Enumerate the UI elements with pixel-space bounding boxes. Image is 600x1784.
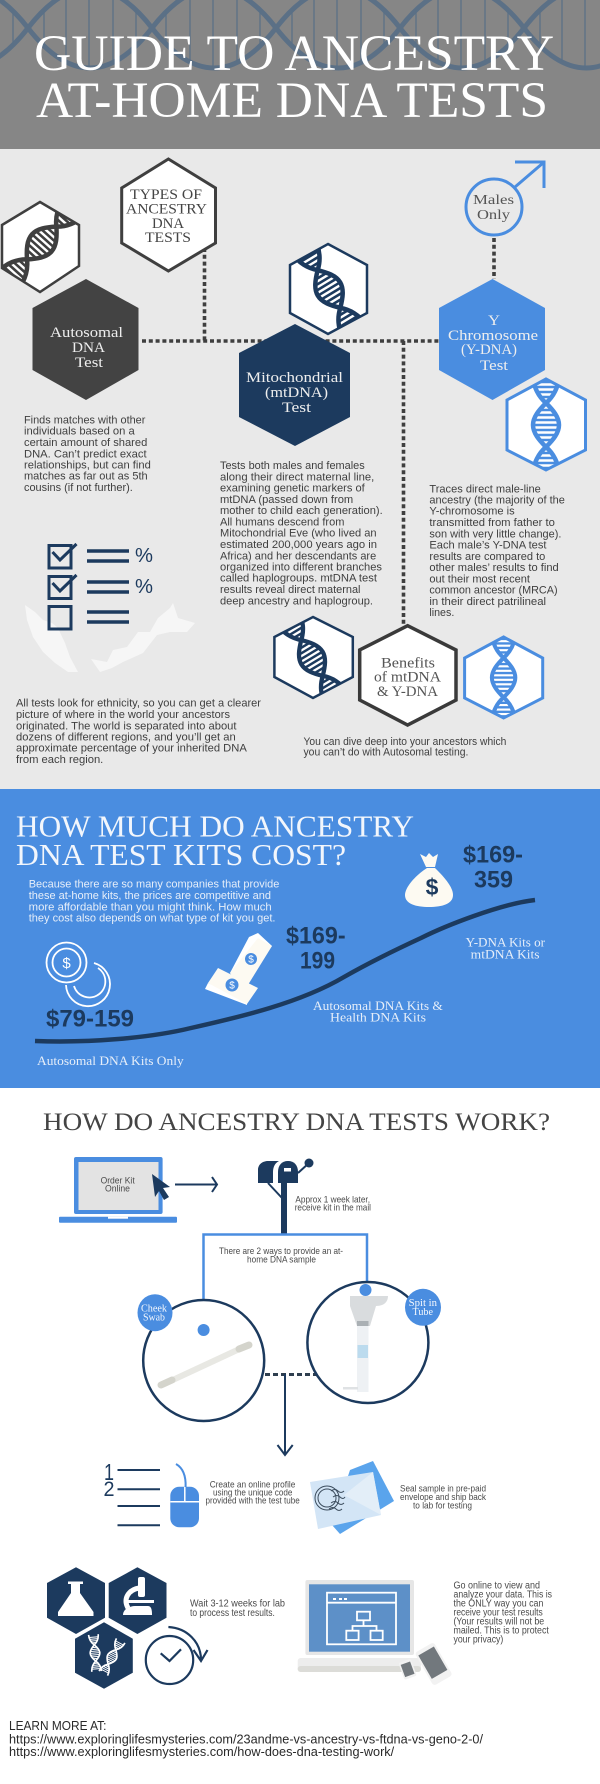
- price: 169-199: [286, 922, 346, 974]
- heading: how do tests work: HOW DO ANCESTRY DNA TESTS WORK?: [43, 1109, 550, 1136]
- hexagon: mitochondrial test: Mitochondrial: [246, 370, 343, 386]
- text: Y-DNA description: common ancestor (MRCA): [429, 585, 558, 597]
- hexagon: mitochondrial test: (mtDNA): [265, 385, 328, 401]
- text: autosomal description: cousins (if not further).: [24, 482, 133, 494]
- DNA helix background: [0, 0, 600, 68]
- price: 169-199: 199: [300, 947, 335, 974]
- icon: mitochondrial DNA hexagon: [290, 239, 367, 339]
- text: one week later: Approx 1 week later,: [295, 1194, 370, 1204]
- hexagon: autosomal test: DNA: [72, 340, 105, 356]
- text: view data online: mailed. This is to protect: [454, 1625, 549, 1636]
- panel: cheek swab: Swab: [143, 1313, 165, 1324]
- hexagon: Y chromosome test: (Y-DNA): [461, 342, 517, 358]
- text: cost description: [29, 879, 279, 924]
- text: autosomal description: certain amount of shared: [24, 437, 147, 449]
- hexagon: Y chromosome test: Chromosome: [448, 328, 538, 344]
- text: cost description: they cost also depends on what type of kit you get.: [29, 912, 276, 924]
- text: ethnicity description: originated. The world is separated into about: [16, 720, 237, 732]
- icon: mailbox: [258, 1158, 314, 1234]
- text: ethnicity description: All tests look for ethnicity, so you can get a clearer: [16, 698, 261, 710]
- price: 169-359: 359: [474, 866, 513, 893]
- text: mitochondrial description: estimated 200,000 years ago in: [220, 539, 377, 551]
- text: Y-DNA description: transmitted from father to: [429, 517, 555, 529]
- text: mitochondrial description: called haplogroups. mtDNA test: [220, 573, 378, 585]
- icon: mtDNA hexagon, benefits row: [274, 611, 353, 705]
- text: view data online: your privacy): [454, 1634, 503, 1645]
- icon: envelope: [310, 1461, 394, 1534]
- hexagon: mitochondrial test: [239, 324, 350, 446]
- price: 79-159: $79-159: [46, 1006, 134, 1033]
- text: view data online: receive your test results: [454, 1607, 543, 1618]
- icon: dollar bills: [205, 933, 272, 1005]
- icon: clock with arrow: [146, 1627, 208, 1684]
- text: autosomal description: DNA. Can’t predict exact: [24, 448, 147, 460]
- icon: Y-DNA hexagon: [507, 375, 586, 475]
- text: create online profile: [206, 1479, 300, 1506]
- text: benefits description: [304, 736, 506, 758]
- label: Y-DNA or mtDNA kits: mtDNA Kits: [471, 947, 540, 961]
- hexagon: benefits of mtDNA and Y-DNA: [360, 626, 456, 725]
- hexagon: autosomal test: [32, 279, 138, 400]
- icon: coins: [46, 942, 110, 1006]
- panel: header banner: [0, 0, 600, 149]
- text: ethnicity description: picture of where in the world your ancestors: [16, 709, 230, 721]
- dotted connectors: [142, 238, 494, 625]
- text: autosomal description: [24, 414, 151, 494]
- text: seal sample: [400, 1484, 486, 1510]
- price: 169-199: $169-: [286, 922, 346, 949]
- label: autosomal kits only: Autosomal DNA Kits Only: [37, 1054, 184, 1068]
- hexagon: mitochondrial test: Test: [282, 400, 312, 416]
- text: autosomal description: Finds matches with other: [24, 414, 146, 426]
- heading: cost: DNA TEST KITS COST?: [16, 837, 346, 872]
- label: autosomal and health kits: Health DNA Kits: [330, 1011, 426, 1025]
- text: mitochondrial description: All humans descend from: [220, 516, 344, 528]
- text: mitochondrial description: Tests both males and females: [220, 460, 365, 472]
- text: Y-DNA description: lines.: [429, 607, 454, 619]
- heading hexagon: types of tests: DNA: [152, 216, 184, 232]
- icon: lab hexagons: [47, 1567, 166, 1689]
- text: Y-DNA description: Each male’s Y-DNA test: [429, 540, 547, 552]
- text: Y-DNA description: results are compared to: [429, 551, 545, 563]
- footer: learn more links: https://www.exploringlifesmysteries.com/how-does-dna-testing-work/: [9, 1744, 395, 1759]
- icon: dollar bills: $: [248, 954, 254, 966]
- icon: numbered list: [104, 1459, 160, 1525]
- text: cost description: Because there are so many companies that provide: [29, 879, 279, 891]
- icon: numbered list: 2: [104, 1478, 114, 1501]
- footer: learn more links: LEARN MORE AT:: [9, 1718, 106, 1733]
- icon: laptop, order kit online: Online: [105, 1184, 130, 1194]
- hexagon: benefits of mtDNA and Y-DNA: of mtDNA: [374, 670, 441, 686]
- text: Y-DNA description: ancestry (the majority of the: [429, 495, 565, 507]
- icon: numbered list: 1: [104, 1459, 114, 1485]
- label: autosomal and health kits: [313, 999, 443, 1025]
- hexagon: autosomal test: Autosomal: [50, 325, 123, 341]
- heading hexagon: types of tests: ANCESTRY: [126, 202, 207, 218]
- text: Y-DNA description: son with very little change).: [429, 528, 561, 540]
- arrow: to mailbox: [175, 1177, 217, 1192]
- price: 169-359: [463, 842, 523, 893]
- icon: laptop, order kit online: [59, 1157, 177, 1223]
- text: mitochondrial description: along their direct maternal line,: [220, 471, 374, 483]
- icon: laptop with results: [298, 1580, 453, 1686]
- heading: cost: HOW MUCH DO ANCESTRY: [16, 809, 414, 844]
- footer: learn more links: https://www.exploringlifesmysteries.com/23andme-vs-ancestry-vs-ftdna-vs-geno-2-0/: [9, 1731, 483, 1746]
- chart: rising price curve: [35, 900, 535, 1041]
- connector: two sample branches: [204, 1234, 367, 1330]
- text: benefits description: You can dive deep into your ancestors which: [304, 736, 506, 748]
- hexagon: Y chromosome test: [439, 279, 545, 400]
- text: wait for results: to process test results.: [190, 1608, 275, 1619]
- text: view data online: [454, 1580, 552, 1645]
- text: wait for results: [190, 1599, 285, 1619]
- dotted connector: [265, 1373, 316, 1376]
- icon: money bag: [405, 853, 453, 907]
- text: benefits description: you can’t do with Autosomal testing.: [304, 746, 468, 758]
- text: mitochondrial description: results reveal direct maternal: [220, 584, 360, 596]
- footer: learn more links: [9, 1718, 483, 1759]
- text: ethnicity description: approximate percentage of your inherited DNA: [16, 743, 247, 755]
- icon: coins: $: [62, 955, 71, 972]
- text: mitochondrial description: Mitochondrial Eve (who lived an: [220, 528, 377, 540]
- panel: how tests work: [43, 1109, 552, 1689]
- hexagon: Y chromosome test: Y: [488, 313, 500, 329]
- text: create online profile: using the unique code: [213, 1488, 292, 1498]
- icon: males only symbol: Males: [473, 193, 514, 208]
- text: view data online: Go online to view and: [454, 1580, 540, 1591]
- text: cost description: these at-home kits, the prices are competitive and: [29, 890, 271, 902]
- heading: cost: [16, 809, 414, 872]
- text: Y-DNA description: out their most recent: [429, 573, 531, 585]
- icon: laptop, order kit online: Order Kit: [101, 1175, 135, 1185]
- icon: money bag: $: [426, 874, 439, 900]
- text: Y-DNA description: [429, 483, 565, 619]
- text: ethnicity description: from each region.: [16, 754, 103, 766]
- icon: males only symbol: [466, 162, 544, 235]
- text: Y-DNA description: Y-chromosome is: [429, 506, 515, 518]
- panel: spit in tube: [307, 1282, 441, 1403]
- text: ethnicity description: [16, 698, 261, 766]
- title: [34, 26, 554, 129]
- price: 169-359: $169-: [463, 842, 523, 869]
- text: mitochondrial description: organized into different branches: [220, 562, 382, 574]
- text: seal sample: envelope and ship back: [400, 1492, 486, 1502]
- text: Y-DNA description: Traces direct male-line: [429, 483, 541, 495]
- icon: autosomal DNA hexagon: [0, 197, 85, 292]
- heading hexagon: types of tests: [122, 159, 216, 271]
- text: seal sample: to lab for testing: [413, 1500, 472, 1510]
- panel: cheek swab: [138, 1294, 264, 1421]
- hexagon: Y chromosome test: Test: [480, 358, 509, 374]
- icon: ethnicity checklist: [49, 544, 153, 629]
- text: create online profile: Create an online profile: [210, 1479, 295, 1489]
- icon: dollar bills: $: [229, 980, 235, 992]
- text: wait for results: Wait 3-12 weeks for lab: [190, 1599, 285, 1610]
- hexagon: benefits of mtDNA and Y-DNA: Benefits: [381, 656, 435, 672]
- panel: kit cost: [0, 789, 600, 1088]
- text: view data online: analyze your data. This is: [454, 1589, 552, 1600]
- text: Y-DNA description: other males’ results to find: [429, 562, 559, 574]
- text: cost description: more affordable than you might think. How much: [29, 901, 272, 913]
- text: mitochondrial description: examining genetic markers of: [220, 483, 366, 495]
- heading hexagon: types of tests: TESTS: [145, 230, 191, 246]
- text: mitochondrial description: mother to child each generation).: [220, 505, 383, 517]
- text: seal sample: Seal sample in pre-paid: [400, 1484, 486, 1494]
- label: Y-DNA or mtDNA kits: [466, 936, 546, 961]
- label: autosomal and health kits: Autosomal DNA Kits &: [313, 999, 443, 1013]
- panel: cheek swab: Cheek: [141, 1304, 168, 1315]
- map: white region map: [25, 603, 195, 672]
- heading hexagon: types of tests: TYPES OF: [130, 187, 202, 203]
- text: Y-DNA description: in their direct patrilineal: [429, 596, 546, 608]
- text: mitochondrial description: [220, 460, 383, 607]
- icon: males only symbol: Only: [477, 208, 510, 223]
- text: create online profile: provided with the test tube: [206, 1496, 300, 1506]
- text: autosomal description: matches as far out as 5th: [24, 471, 148, 483]
- arrow: down to next steps: [278, 1374, 293, 1455]
- text: autosomal description: individuals based on a: [24, 426, 135, 438]
- text: view data online: the ONLY way you can: [454, 1598, 543, 1609]
- text: two ways: There are 2 ways to provide an at-: [219, 1246, 343, 1256]
- text: ethnicity description: dozens of different regions, and you’ll get an: [16, 731, 236, 743]
- text: view data online: (Your results will not be: [454, 1616, 545, 1627]
- label: Y-DNA or mtDNA kits: Y-DNA Kits or: [466, 936, 546, 950]
- icon: ethnicity checklist: %: [135, 576, 153, 598]
- text: mitochondrial description: mtDNA (passed down from: [220, 494, 353, 506]
- text: autosomal description: relationships, but can find: [24, 459, 151, 471]
- panel: spit in tube: Tube: [412, 1307, 433, 1318]
- text: mitochondrial description: Africa) and her descendants are: [220, 550, 376, 562]
- title: AT-HOME DNA TESTS: [36, 73, 548, 129]
- panel: spit in tube: Spit in: [409, 1298, 438, 1309]
- text: mitochondrial description: deep ancestry and haplogroup.: [220, 595, 373, 607]
- text: two ways: home DNA sample: [247, 1254, 316, 1264]
- hexagon: benefits of mtDNA and Y-DNA: & Y-DNA: [377, 684, 438, 700]
- icon: Y-DNA hexagon, benefits row: [465, 633, 543, 723]
- icon: ethnicity checklist: %: [135, 545, 153, 567]
- title: GUIDE TO ANCESTRY: [34, 26, 554, 82]
- text: one week later: [295, 1194, 371, 1213]
- text: one week later: receive kit in the mail: [295, 1203, 371, 1213]
- hexagon: autosomal test: Test: [75, 355, 104, 371]
- panel: types of ancestry DNA tests: [0, 149, 600, 789]
- icon: mouse: [170, 1464, 199, 1527]
- text: two ways: [219, 1246, 343, 1264]
